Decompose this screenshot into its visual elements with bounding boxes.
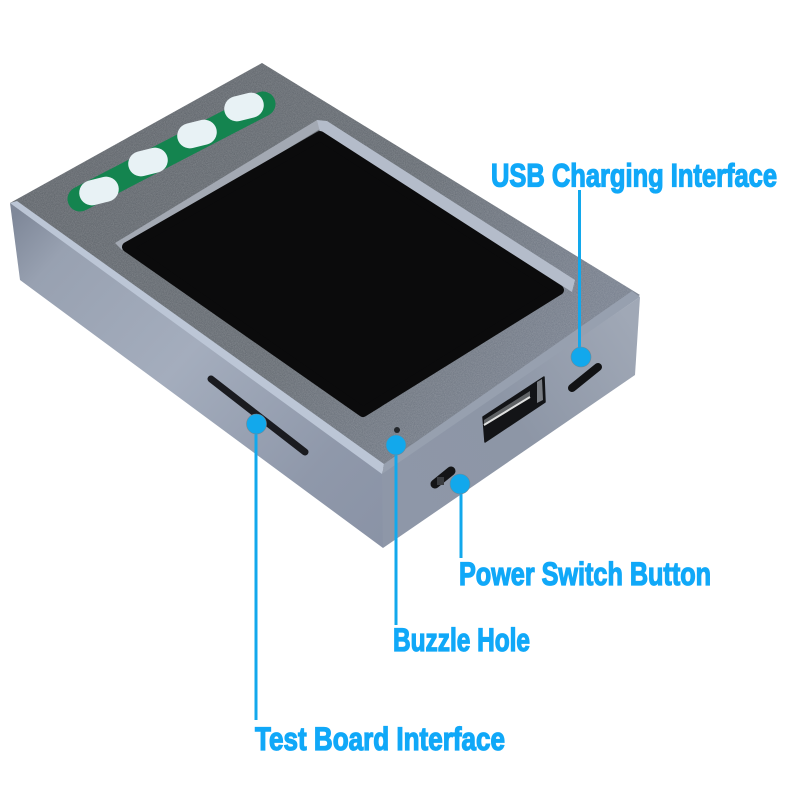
callout: power switch button: [450, 474, 711, 592]
callout: buzzle hole: Buzzle Hole: [393, 622, 530, 658]
screen: [127, 136, 559, 412]
button 3: [175, 117, 219, 151]
top face: [10, 63, 640, 469]
button 1: [77, 174, 121, 208]
callout: buzzle hole: [386, 435, 530, 658]
left edge chamfer: [10, 201, 384, 474]
device: [10, 63, 640, 548]
front edge chamfer: [382, 291, 640, 474]
callout: USB charging interface: [491, 158, 777, 367]
test board slot: [211, 379, 305, 452]
micro USB port: [572, 367, 598, 388]
callout: power switch button: Power Switch Button: [459, 556, 711, 592]
button strip: [77, 90, 266, 208]
front side face: [382, 297, 640, 548]
screen bezel: upper right strip: [317, 120, 575, 292]
button 2: [126, 145, 170, 179]
callout: test board interface: [246, 414, 505, 757]
left side face: [10, 203, 384, 548]
buzzer hole: [394, 427, 400, 433]
button 4: [222, 90, 266, 124]
power switch: [435, 471, 451, 485]
USB-A port: [483, 377, 545, 442]
screen bezel: upper left strip: [115, 120, 325, 250]
callout: test board interface: Test Board Interface: [255, 721, 505, 757]
